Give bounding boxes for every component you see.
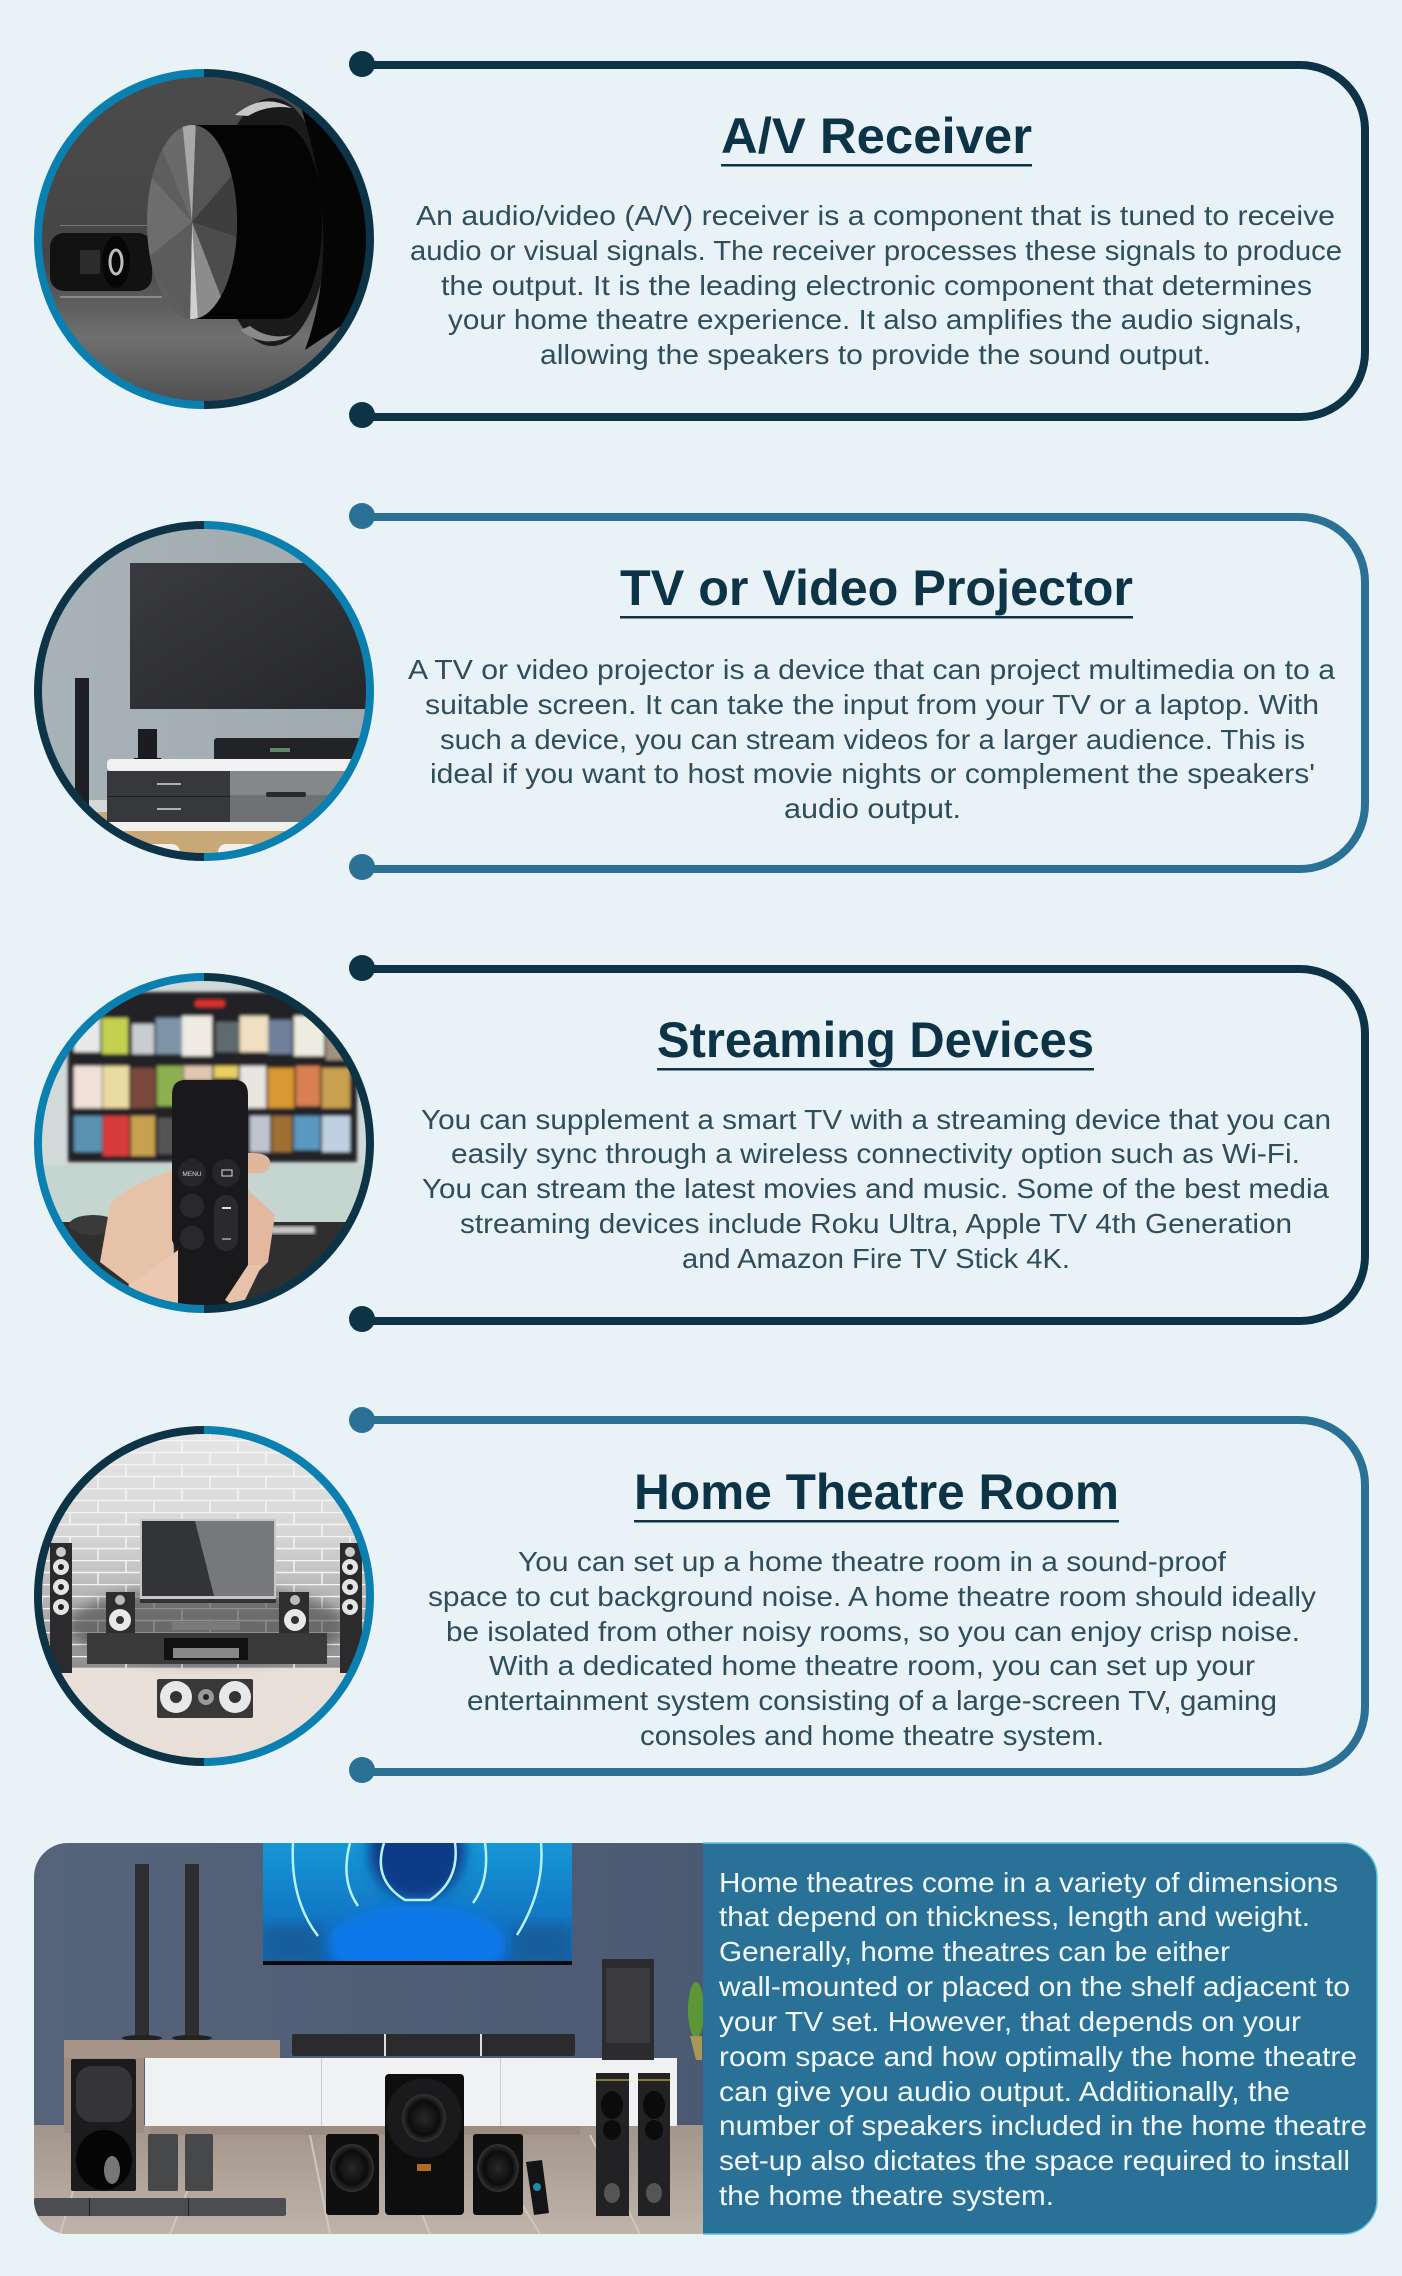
text block: your home theatre experience. It also amplifies the audio signals, xyxy=(448,304,1302,335)
text block: suitable screen. It can take the input from your TV or a laptop. With xyxy=(425,689,1319,720)
paragraph: that depend on thickness, length and weight. xyxy=(719,1901,1310,1932)
plant xyxy=(688,1982,704,2060)
text block xyxy=(410,200,1342,370)
text block xyxy=(428,1546,1316,1751)
heading: TV or Video Projector xyxy=(620,560,1133,616)
paragraph: the home theatre system. xyxy=(719,2180,1054,2211)
text block: easily sync through a wireless connectivity option such as Wi-Fi. xyxy=(451,1138,1300,1169)
panel: TV or Video Projector xyxy=(30,503,1365,880)
text block: allowing the speakers to provide the sound output. xyxy=(540,339,1211,370)
remote button label: MENU xyxy=(182,1171,202,1178)
text block: such a device, you can stream videos for a larger audience. This is xyxy=(440,724,1305,755)
heading: Home Theatre Room xyxy=(634,1464,1119,1520)
panel: home theatre dimensions xyxy=(34,1800,1377,2234)
paragraph xyxy=(718,1867,1367,2211)
text block: be isolated from other noisy rooms, so you can enjoy crisp noise. xyxy=(446,1616,1300,1647)
text block: streaming devices include Roku Ultra, Apple TV 4th Generation xyxy=(460,1208,1292,1239)
bracket outline xyxy=(349,51,1365,428)
text block: You can stream the latest movies and music. Some of the best media xyxy=(422,1173,1329,1204)
text block: audio output. xyxy=(784,793,961,824)
text block: the output. It is the leading electronic component that determines xyxy=(441,270,1312,301)
bracket outline xyxy=(349,955,1365,1332)
text block: ideal if you want to host movie nights or complement the speakers' xyxy=(430,758,1315,789)
photo: speakers and TV in brick room xyxy=(42,1434,366,1758)
heading: A/V Receiver xyxy=(721,108,1032,164)
text block: consoles and home theatre system. xyxy=(640,1720,1104,1751)
image ring xyxy=(38,1430,370,1762)
panel: Home Theatre Room xyxy=(30,1407,1365,1783)
text block: You can supplement a smart TV with a streaming device that you can xyxy=(421,1104,1331,1135)
text block xyxy=(408,654,1335,824)
image ring xyxy=(38,525,370,857)
paragraph: can give you audio output. Additionally, the xyxy=(719,2076,1290,2107)
paragraph: Home theatres come in a variety of dimensions xyxy=(719,1867,1338,1898)
photo: receiver volume knob xyxy=(42,77,366,401)
text block: entertainment system consisting of a large-screen TV, gaming xyxy=(467,1685,1277,1716)
photo: living room with wall TV xyxy=(42,529,366,853)
photo: hand holding remote before smart TV xyxy=(42,981,366,1305)
bracket outline xyxy=(349,1407,1365,1783)
text block: and Amazon Fire TV Stick 4K. xyxy=(682,1243,1070,1274)
text block: space to cut background noise. A home theatre room should ideally xyxy=(428,1581,1316,1612)
image ring xyxy=(38,977,370,1309)
paragraph: set-up also dictates the space required to install xyxy=(719,2145,1350,2176)
text block: With a dedicated home theatre room, you can set up your xyxy=(489,1650,1255,1681)
panel: A/V Receiver xyxy=(30,51,1365,428)
paragraph: number of speakers included in the home theatre xyxy=(719,2110,1367,2141)
text block: An audio/video (A/V) receiver is a component that is tuned to receive xyxy=(416,200,1335,231)
heading: Streaming Devices xyxy=(657,1012,1094,1068)
paragraph: Generally, home theatres can be either xyxy=(719,1936,1230,1967)
text block xyxy=(421,1104,1331,1274)
TV on wall xyxy=(263,1843,572,1965)
paragraph: your TV set. However, that depends on your xyxy=(719,2006,1301,2037)
text background xyxy=(703,1843,1377,2234)
bracket outline xyxy=(349,503,1365,880)
paragraph: room space and how optimally the home theatre xyxy=(719,2041,1357,2072)
photo: home theatre systems on a cabinet xyxy=(34,1800,1377,2234)
panel: Streaming Devices xyxy=(30,955,1365,1332)
text block: You can set up a home theatre room in a sound-proof xyxy=(518,1546,1226,1577)
paragraph: wall-mounted or placed on the shelf adjacent to xyxy=(718,1971,1350,2002)
text block: audio or visual signals. The receiver processes these signals to produce xyxy=(410,235,1342,266)
image ring xyxy=(38,73,370,405)
text block: A TV or video projector is a device that can project multimedia on to a xyxy=(408,654,1335,685)
